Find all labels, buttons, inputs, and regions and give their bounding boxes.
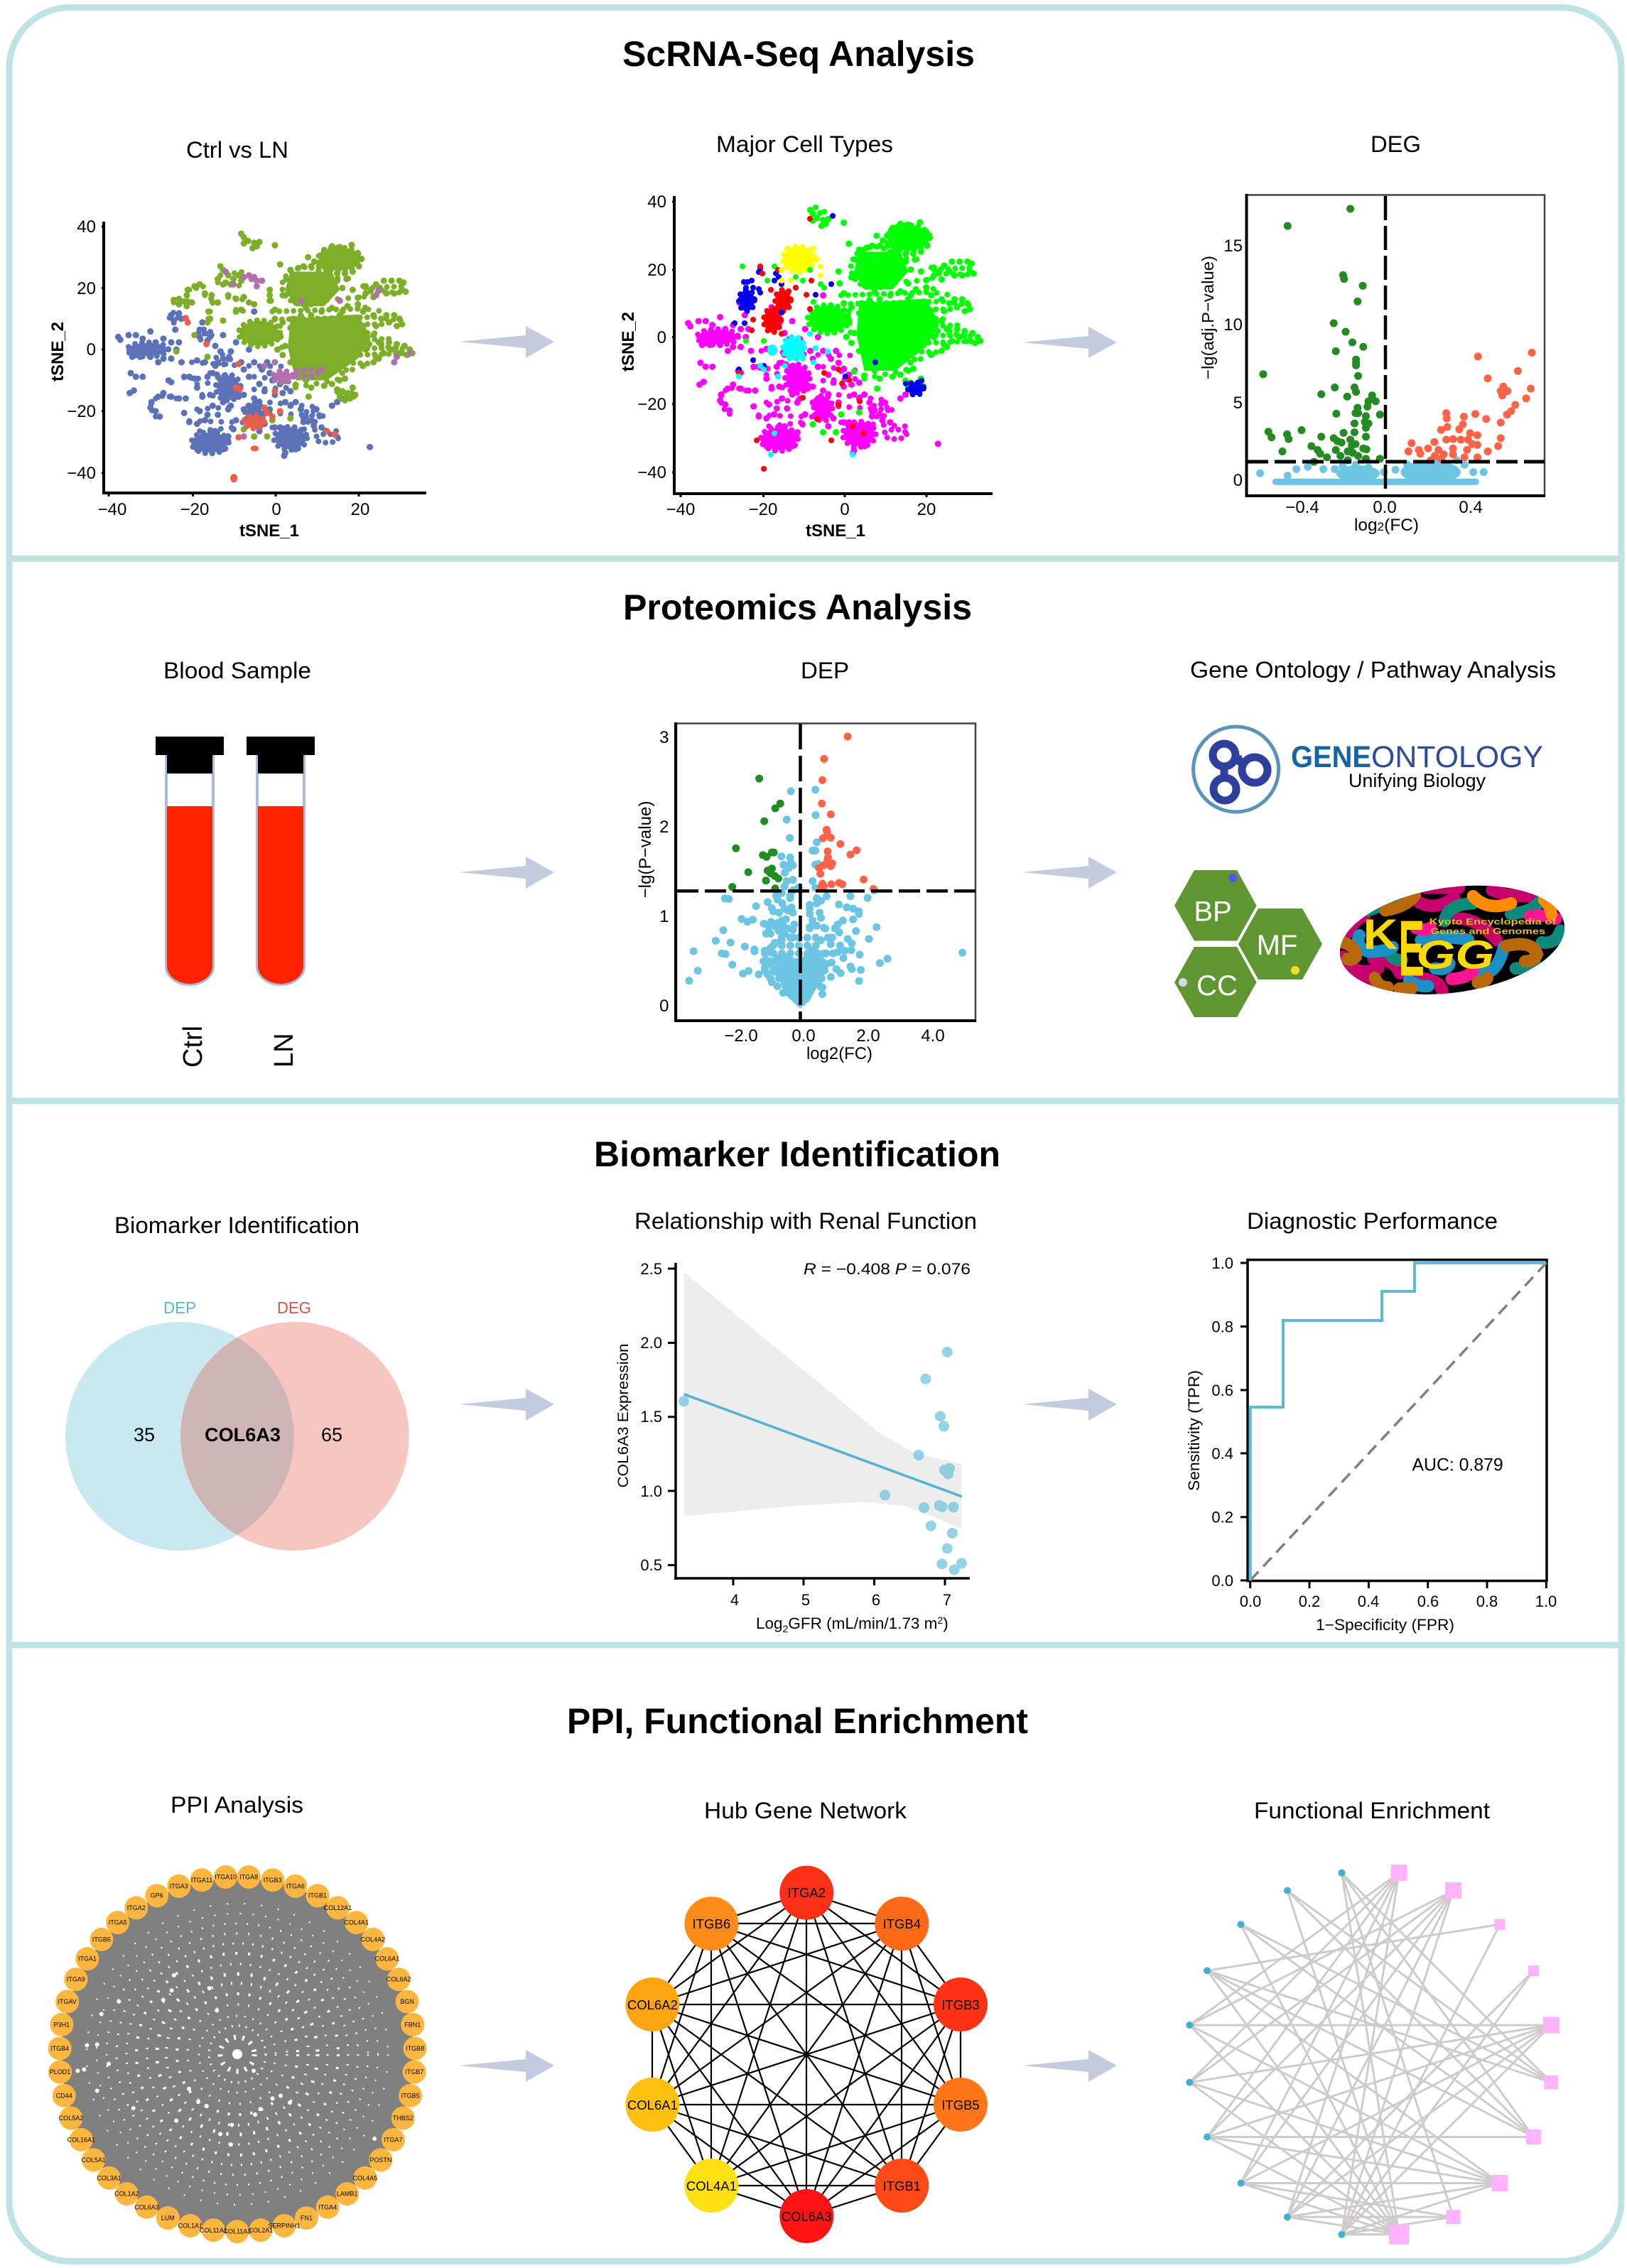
tSNE chart: Ctrl vs LN: −20 <box>180 500 209 519</box>
subheading: Gene Ontology / Pathway Analysis: Gene Ontology / Pathway Analysis <box>1190 657 1556 683</box>
network: PPI ring: ITGA3 <box>170 1882 188 1889</box>
network: PPI ring: CD44 <box>56 2092 72 2099</box>
arrow <box>1022 1389 1117 1421</box>
network: PPI ring: COL4A5 <box>353 2174 377 2181</box>
tSNE chart: Major Cell Types: −40 <box>666 500 695 519</box>
subheading: DEG: DEG <box>1371 131 1421 157</box>
ROC curve: 1−Specificity (FPR) <box>1316 1616 1454 1634</box>
Venn diagram: DEP and DEG: 65 <box>321 1424 342 1445</box>
volcano plot: DEG: 15 <box>1223 237 1243 256</box>
network: hub genes: ITGB1 <box>883 2179 921 2193</box>
network: PPI ring: COL2A1 <box>249 2227 273 2234</box>
network: hub genes: COL4A1 <box>686 2179 737 2193</box>
tSNE chart: Ctrl vs LN <box>48 217 426 541</box>
network: PPI ring: ITGB8 <box>406 2045 424 2052</box>
network: PPI ring: ITGB3 <box>264 1877 282 1884</box>
heading: ScRNA-Seq Analysis: ScRNA-Seq Analysis <box>622 34 975 74</box>
volcano plot: DEP: 1 <box>659 907 669 926</box>
hexagon: MF: MF <box>1257 930 1297 961</box>
icon: KEGG logo: E <box>1398 904 1425 992</box>
network: PPI ring: POSTN <box>369 2156 391 2164</box>
network: PPI ring: ITGA6 <box>286 1882 305 1889</box>
scatter plot: COL6A3 vs GFR: 2 <box>937 1615 943 1626</box>
scatter plot: COL6A3 vs GFR: Log <box>756 1615 783 1632</box>
hexagon: BP <box>1174 870 1256 940</box>
ROC curve: AUC: 0.879 <box>1412 1456 1503 1475</box>
hexagon: CC: CC <box>1196 970 1238 1002</box>
tSNE chart: Major Cell Types: 0 <box>657 328 666 347</box>
illustration: blood tubes Ctrl and LN: Ctrl <box>178 1026 208 1068</box>
ROC curve: 0.4 <box>1211 1445 1233 1463</box>
subheading: Hub Gene Network: Hub Gene Network <box>704 1798 907 1823</box>
network: PPI ring <box>48 1865 427 2243</box>
icon: KEGG logo <box>1340 885 1564 994</box>
scatter plot: COL6A3 vs GFR: 4 <box>730 1591 739 1609</box>
Venn diagram: DEP and DEG: 35 <box>134 1424 155 1445</box>
ROC curve: Sensitivity (TPR) <box>1185 1370 1203 1491</box>
network: PPI ring: ITGB7 <box>405 2068 423 2076</box>
tSNE chart: Ctrl vs LN: 0 <box>271 500 281 519</box>
heading: Biomarker Identification: Biomarker Identification <box>594 1134 1000 1174</box>
scatter plot: COL6A3 vs GFR: 2.0 <box>640 1334 662 1352</box>
scatter plot: COL6A3 vs GFR: 6 <box>872 1591 880 1609</box>
network: hub genes: ITGB5 <box>941 2098 980 2112</box>
volcano plot: DEG: 0 <box>1233 471 1243 490</box>
icon: Gene Ontology logo: Unifying Biology <box>1348 770 1486 791</box>
scatter plot: COL6A3 vs GFR: 0.5 <box>640 1556 662 1574</box>
Venn diagram: DEP and DEG: COL6A3 <box>205 1424 281 1445</box>
network: hub genes: ITGB4 <box>883 1916 921 1931</box>
network: PPI ring: ITGB4 <box>50 2045 69 2052</box>
network: PPI ring: LAMB1 <box>337 2191 357 2198</box>
volcano plot: DEG: 0.4 <box>1459 498 1483 517</box>
illustration: blood tubes Ctrl and LN: LN <box>269 1033 299 1068</box>
tSNE chart: Ctrl vs LN: −40 <box>67 464 96 483</box>
icon: KEGG logo: GG <box>1416 933 1494 977</box>
arrow <box>1022 327 1117 358</box>
network: PPI ring: ITGA1 <box>78 1955 97 1963</box>
network: hub genes: COL6A3 <box>782 2209 832 2224</box>
network: PPI ring: COL6A2 <box>387 1976 411 1983</box>
volcano plot: DEG: 0.0 <box>1373 498 1397 517</box>
network: hub genes: ITGB6 <box>693 1916 730 1931</box>
icon: KEGG logo: Kyoto Encyclopedia of <box>1429 917 1557 927</box>
network: PPI ring: COL4A1 <box>344 1919 369 1926</box>
network: PPI ring: FN1 <box>301 2215 313 2222</box>
illustration: blood tubes Ctrl and LN <box>156 737 315 1068</box>
arrow <box>1022 857 1117 889</box>
ROC curve: 0.8 <box>1211 1318 1233 1335</box>
network: PPI ring: COL1A2 <box>114 2191 139 2198</box>
icon: KEGG logo: K <box>1363 911 1398 958</box>
network: functional enrichment <box>1186 1865 1560 2245</box>
tSNE chart: Major Cell Types: −20 <box>637 395 666 414</box>
hexagon: CC <box>1174 947 1256 1017</box>
network: PPI ring: COL11A2 <box>223 2228 251 2235</box>
volcano plot: DEG: 10 <box>1223 315 1243 335</box>
tSNE chart: Major Cell Types: tSNE_2 <box>619 312 638 371</box>
scatter plot: COL6A3 vs GFR <box>615 1260 971 1634</box>
volcano plot: DEG: −0.4 <box>1285 498 1319 517</box>
scatter plot: COL6A3 vs GFR: ) <box>943 1615 948 1632</box>
volcano plot: DEP: 4.0 <box>921 1026 945 1046</box>
tSNE chart: Ctrl vs LN: −40 <box>98 500 126 519</box>
tSNE chart: Ctrl vs LN: tSNE_1 <box>239 521 299 541</box>
subheading: Major Cell Types: Major Cell Types <box>716 131 893 157</box>
tSNE chart: Ctrl vs LN: 20 <box>351 500 369 519</box>
network: hub genes: COL6A1 <box>627 2098 678 2112</box>
ROC curve: 0.8 <box>1476 1593 1498 1610</box>
network: PPI ring: ITGA7 <box>384 2136 403 2143</box>
ROC curve: 1.0 <box>1211 1254 1233 1272</box>
volcano plot: DEP: −2.0 <box>724 1026 758 1046</box>
network: PPI ring: COL5A2 <box>59 2115 83 2122</box>
network: PPI ring: ITGB6 <box>92 1936 111 1943</box>
heading: Proteomics Analysis: Proteomics Analysis <box>623 587 972 627</box>
volcano plot: DEP: −lg(P−value) <box>636 801 655 898</box>
panel: Proteomics analysis <box>156 587 1570 1068</box>
volcano plot: DEP <box>636 722 976 1063</box>
icon: Gene Ontology logo: ONTOLOGY <box>1371 740 1543 774</box>
tSNE chart: Major Cell Types: 40 <box>647 192 666 212</box>
subheading: Ctrl vs LN: Ctrl vs LN <box>186 137 288 163</box>
tSNE chart: Major Cell Types: 0 <box>840 500 850 519</box>
tSNE chart: Major Cell Types: tSNE_1 <box>806 521 865 541</box>
scatter plot: COL6A3 vs GFR: 1.0 <box>640 1482 662 1500</box>
subheading: Blood Sample: Blood Sample <box>163 658 311 683</box>
volcano plot: DEG: −lg(adj.P−value) <box>1199 256 1217 379</box>
scatter plot: COL6A3 vs GFR: 7 <box>943 1591 951 1609</box>
ROC curve: 0.2 <box>1299 1593 1320 1610</box>
ROC curve: 0.2 <box>1211 1509 1233 1526</box>
ROC curve: 0.0 <box>1240 1593 1261 1610</box>
network: PPI ring: ITGA8 <box>239 1874 258 1881</box>
ROC curve: 0.0 <box>1211 1572 1233 1590</box>
hexagon: BP: BP <box>1194 896 1232 928</box>
network: hub genes: COL6A2 <box>627 1997 678 2012</box>
volcano plot: DEP: 2 <box>659 818 669 837</box>
arrow <box>459 2050 554 2082</box>
subheading: Relationship with Renal Function: Relationship with Renal Function <box>634 1208 977 1234</box>
panel: ScRNA-Seq analysis <box>48 34 1545 541</box>
arrow <box>459 1389 554 1421</box>
heading: PPI, Functional Enrichment: PPI, Functional Enrichment <box>567 1701 1028 1741</box>
volcano plot: DEP: log2(FC) <box>806 1044 872 1063</box>
network: PPI ring: LUM <box>161 2215 175 2222</box>
tSNE chart: Ctrl vs LN: 40 <box>77 217 96 237</box>
subheading: Functional Enrichment: Functional Enrichment <box>1254 1798 1490 1823</box>
volcano plot: DEP: 0.0 <box>791 1026 816 1046</box>
tube: LN <box>247 737 315 984</box>
network: PPI ring: ITGB1 <box>308 1892 327 1899</box>
panel: Biomarker identification <box>65 1134 1557 1634</box>
icon: BP MF CC hexagons <box>1174 870 1322 1017</box>
scatter plot: COL6A3 vs GFR: 5 <box>801 1591 810 1609</box>
scatter plot: COL6A3 vs GFR: GFR (mL/min/1.73 m <box>788 1615 937 1632</box>
volcano plot: DEP: 3 <box>659 728 669 747</box>
icon: Gene Ontology logo <box>1194 727 1543 812</box>
network: PPI ring: BGN <box>400 1998 414 2005</box>
scatter plot: COL6A3 vs GFR: 2.5 <box>640 1260 662 1278</box>
network: hub genes <box>625 1866 988 2243</box>
ROC curve: 0.4 <box>1358 1593 1379 1610</box>
Venn diagram: DEP and DEG: DEP <box>163 1298 196 1317</box>
network: PPI ring: ITGB5 <box>401 2092 420 2099</box>
network: hub genes: ITGA2 <box>788 1885 826 1900</box>
scatter plot: COL6A3 vs GFR: 1.5 <box>640 1408 662 1426</box>
scatter plot: COL6A3 vs GFR: 2 <box>783 1623 789 1634</box>
arrow <box>1022 2050 1117 2082</box>
volcano plot: DEG: 5 <box>1233 394 1243 413</box>
tSNE chart: Major Cell Types: −40 <box>637 463 666 482</box>
scatter plot: COL6A3 vs GFR: R = −0.408 P = 0.076 <box>804 1260 971 1278</box>
network: PPI ring: COL6A3 <box>134 2203 159 2210</box>
icon: Gene Ontology logo: GENE <box>1291 740 1371 774</box>
network: PPI ring: COL5A1 <box>82 2156 106 2164</box>
arrow <box>459 857 554 889</box>
ROC curve: 1.0 <box>1535 1593 1557 1610</box>
network: PPI ring: SERPINH1 <box>268 2222 301 2229</box>
ROC curve: 0.6 <box>1417 1593 1439 1610</box>
arrow <box>459 326 554 358</box>
ROC curve <box>1185 1254 1557 1634</box>
tSNE chart: Ctrl vs LN: 20 <box>77 279 96 298</box>
network: PPI ring: ITGA9 <box>67 1976 85 1983</box>
network: PPI ring: ITGA11 <box>191 1877 212 1884</box>
volcano plot: DEP: 2.0 <box>856 1026 880 1046</box>
volcano plot: DEP: 0 <box>659 997 669 1016</box>
network: PPI ring: COL1A1 <box>178 2222 202 2229</box>
network: PPI ring: ITGAV <box>58 1998 77 2005</box>
subheading: Diagnostic Performance: Diagnostic Performance <box>1247 1208 1498 1234</box>
tSNE chart: Ctrl vs LN: 0 <box>87 340 96 359</box>
tSNE chart: Major Cell Types: −20 <box>749 500 777 519</box>
network: PPI ring: THBS2 <box>393 2115 413 2122</box>
tSNE chart: Ctrl vs LN: tSNE_2 <box>48 322 67 381</box>
Venn diagram: DEP and DEG: DEG <box>277 1298 311 1317</box>
volcano plot: DEG: log2(FC) <box>1354 516 1419 535</box>
network: PPI ring: PLOD1 <box>50 2068 70 2076</box>
Venn diagram: DEP and DEG <box>65 1298 409 1551</box>
subheading: Biomarker Identification: Biomarker Identification <box>114 1212 360 1238</box>
ROC curve: 0.6 <box>1211 1382 1233 1399</box>
network: PPI ring: ITGA4 <box>318 2203 337 2210</box>
scatter plot: COL6A3 vs GFR: COL6A3 Expression <box>615 1344 632 1487</box>
subheading: PPI Analysis: PPI Analysis <box>171 1792 303 1818</box>
network: PPI ring: P3H1 <box>54 2021 70 2028</box>
network: hub genes: ITGB3 <box>941 1997 980 2012</box>
network: PPI ring: COL4A2 <box>361 1936 385 1943</box>
hexagon: MF <box>1238 908 1322 980</box>
tSNE chart: Major Cell Types <box>619 192 993 541</box>
network: PPI ring: COL3A1 <box>97 2174 121 2181</box>
panel: PPI and functional enrichment <box>48 1701 1560 2245</box>
network: PPI ring: ITGA10 <box>215 1874 237 1881</box>
network: PPI ring: COL11A1 <box>200 2227 227 2234</box>
icon: KEGG logo: Genes and Genomes <box>1430 926 1545 936</box>
network: PPI ring: COL6A1 <box>375 1955 399 1963</box>
network: PPI ring: COL16A1 <box>67 2136 95 2143</box>
network: PPI ring: COL12A1 <box>324 1904 352 1911</box>
network: PPI ring: FBN1 <box>404 2021 421 2028</box>
network: PPI ring: ITGA5 <box>109 1919 127 1926</box>
volcano plot: DEG <box>1199 194 1545 535</box>
network: PPI ring: ITGA2 <box>127 1904 146 1911</box>
network: PPI ring: GP6 <box>151 1892 163 1899</box>
tube: Ctrl <box>156 737 224 984</box>
subheading: DEP: DEP <box>801 658 849 683</box>
tSNE chart: Ctrl vs LN: −20 <box>67 402 96 421</box>
tSNE chart: Major Cell Types: 20 <box>917 500 936 519</box>
tSNE chart: Major Cell Types: 20 <box>647 261 666 280</box>
